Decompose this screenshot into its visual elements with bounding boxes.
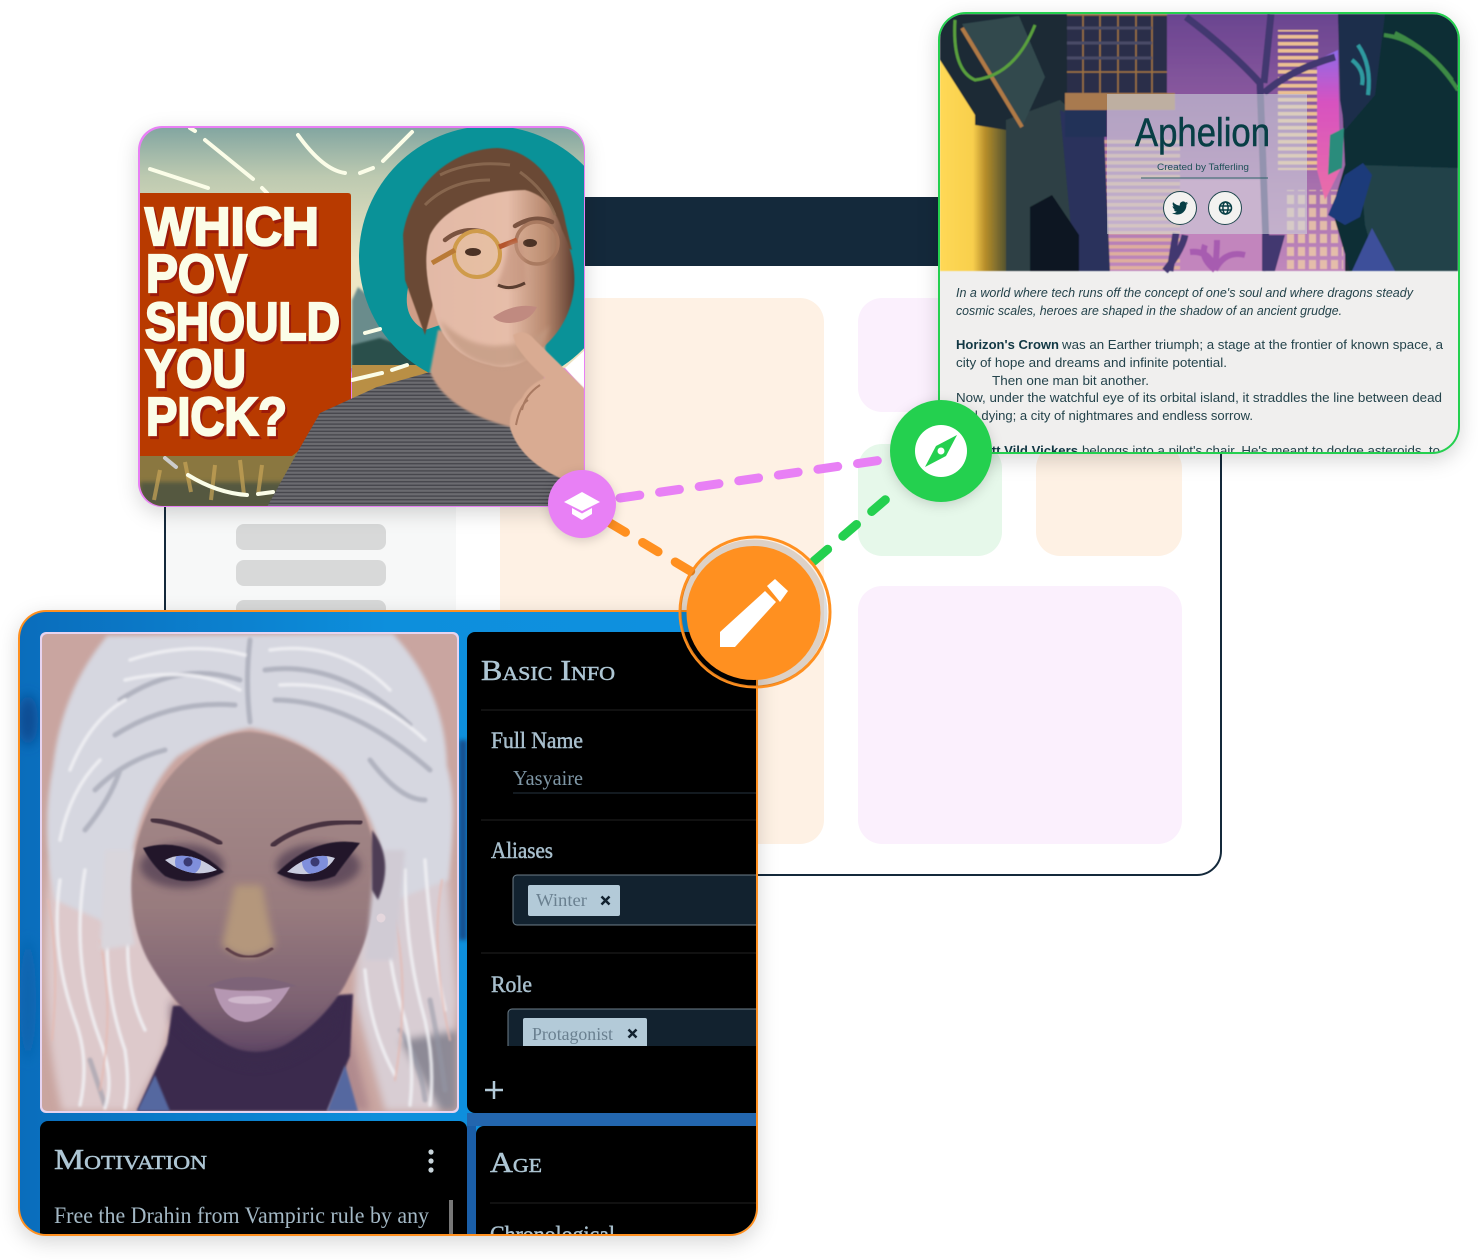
- thumbnail headline: PICK?: [146, 387, 287, 447]
- face: [131, 732, 377, 1052]
- field: full name: Full Name: [491, 728, 583, 753]
- tag: Protagonist: Protagonist: [532, 1024, 613, 1044]
- icon: globe: [1208, 192, 1242, 224]
- story description text: was an Earther triumph; a stage at the frontier of known space, a: [1061, 338, 1443, 352]
- card: character sheet: [18, 610, 778, 1251]
- thumbnail headline: WHICH: [145, 197, 319, 257]
- right buildings: [1328, 14, 1458, 271]
- sidebar pill 1: [236, 524, 386, 550]
- story description text: city of hope and dreams and infinite potential.: [956, 356, 1227, 370]
- story description text: cosmic scales, heroes are shaped in the shadow of an ancient grudge.: [956, 304, 1342, 318]
- eyebrows: [153, 820, 220, 843]
- thumbnail headline: [145, 197, 340, 447]
- red title box: [140, 193, 351, 456]
- field: chronological: Chronological: [490, 1222, 615, 1247]
- translucent title overlay: [1107, 94, 1307, 234]
- icon: menu dots: [428, 1149, 434, 1173]
- dashed connector: pink: [620, 460, 882, 498]
- green badge: compass: [890, 400, 992, 502]
- heading: Basic Info: Basic Info: [481, 655, 615, 687]
- field: role: [491, 972, 778, 1069]
- story description text: [956, 286, 1443, 458]
- pink large block: [858, 586, 1182, 844]
- thumbnail sky background: [140, 128, 584, 368]
- credit underline: [1141, 178, 1268, 179]
- white corner: [565, 350, 585, 390]
- hair: [403, 148, 572, 335]
- thumbnail headline: SHOULD: [145, 292, 340, 352]
- panel: motivation: [40, 1121, 467, 1251]
- pink badge: graduation cap: [548, 470, 616, 538]
- field: aliases: Aliases: [491, 838, 553, 863]
- left building and yellow wall: [940, 16, 1110, 271]
- field: full name: [491, 728, 757, 793]
- stubble: [440, 320, 550, 367]
- lips: [493, 306, 537, 323]
- central tree branches: [1165, 14, 1335, 271]
- story description text: Horizon's Crown: [956, 338, 1059, 352]
- peach small block: [1036, 444, 1182, 556]
- story description text: belongs into a pilot's chair. He's meant to dodge asteroids, to: [1082, 444, 1440, 458]
- lower hair and shoulders: [45, 830, 457, 1111]
- icon: add: [485, 1081, 503, 1099]
- dashboard sidebar: [166, 266, 456, 626]
- chin shadow: [170, 1000, 340, 1068]
- field: full name: Yasyaire: [513, 766, 583, 790]
- vines: [955, 20, 1035, 80]
- card: Aphelion world page: [938, 12, 1460, 458]
- earring: [376, 914, 386, 922]
- hand: [510, 332, 584, 482]
- nose: [497, 240, 526, 288]
- portrait frame: [40, 632, 459, 1113]
- creator credit: Created by Tafferling: [1157, 162, 1249, 173]
- sunset sky with towers: [1100, 14, 1345, 271]
- motivation text: Free the Drahin from Vampiric rule by any: [54, 1203, 429, 1228]
- panel: age: [476, 1126, 776, 1251]
- background dashboard panel: [165, 198, 1221, 875]
- thumbnail headline: POV: [146, 244, 247, 304]
- eye right: [276, 842, 360, 888]
- icon: twitter: [1164, 192, 1196, 224]
- field: role: Role: [491, 972, 532, 997]
- teal circle: [359, 128, 584, 374]
- tag: Winter: [528, 885, 620, 916]
- thumbnail headline: YOU: [145, 339, 246, 399]
- blue textured background: [18, 612, 757, 1236]
- orange badge: pencil: [680, 537, 830, 687]
- icon: pencil: [720, 579, 788, 647]
- palm silhouette: [1190, 240, 1245, 270]
- dashboard header bar: [165, 198, 1221, 266]
- story description text: Now, under the watchful eye of its orbital island, it straddles the line between dead: [956, 391, 1442, 405]
- peach content block: [500, 298, 824, 844]
- right hair and ear: [365, 850, 405, 960]
- title: Aphelion: Aphelion: [1135, 111, 1270, 155]
- story description text: Then one man bit another.: [992, 374, 1149, 388]
- left hair over temple: [100, 850, 135, 950]
- white hair mass: [47, 634, 453, 932]
- sidebar pill 2: [236, 560, 386, 586]
- tag: Protagonist: [523, 1018, 647, 1058]
- panel: basic info: [467, 632, 778, 1113]
- dashed connector: orange: [610, 523, 692, 572]
- brows: [445, 219, 552, 240]
- story description text: In a world where tech runs off the concept of one's soul and where dragons steady: [956, 286, 1414, 300]
- nose: [222, 885, 275, 956]
- field: aliases: [491, 838, 773, 925]
- green small block: [858, 444, 1002, 556]
- pink small block: [858, 298, 1002, 412]
- dashed connector: green: [814, 494, 892, 561]
- mountain and field: [140, 286, 428, 506]
- balcony: [1065, 15, 1175, 137]
- story description text: Everett Vild Vickers: [956, 444, 1078, 458]
- tag: Winter: Winter: [536, 890, 587, 910]
- hair strands: [48, 640, 450, 1108]
- story description text: and dying; a city of nightmares and endless sorrow.: [956, 409, 1253, 423]
- heading: Motivation: Motivation: [54, 1144, 207, 1176]
- sidebar pill 3: [236, 600, 386, 626]
- face: [426, 190, 574, 367]
- man portrait: [267, 148, 585, 507]
- decorative sketch lines: [150, 128, 412, 495]
- Aphelion city illustration: [940, 14, 1458, 271]
- heading: Age: Age: [490, 1147, 542, 1179]
- scrollbar: [449, 1200, 453, 1240]
- card: thumbnail "Which POV should you pick?": [138, 126, 621, 508]
- glasses: [454, 231, 500, 277]
- eye left: [140, 844, 224, 888]
- neck: [137, 994, 353, 1111]
- lips: [207, 977, 297, 1022]
